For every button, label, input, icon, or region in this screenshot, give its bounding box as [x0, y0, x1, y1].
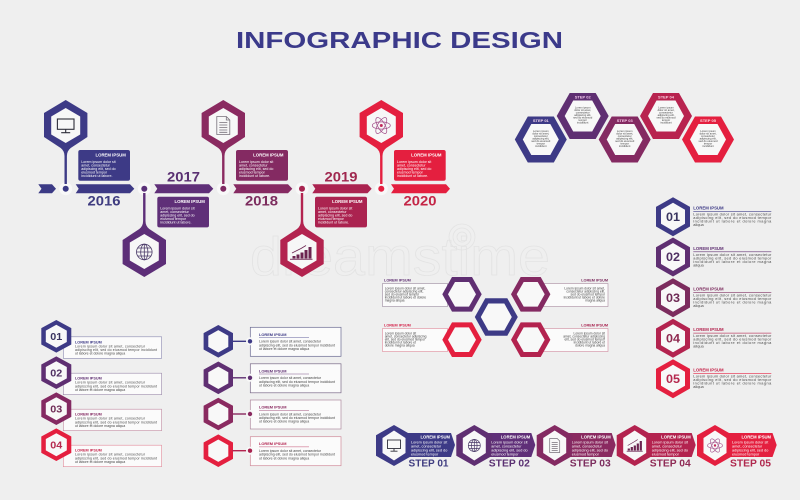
banner step 04: STEP 04	[650, 459, 691, 470]
step 01 hexagon: dolor sit amet,	[532, 132, 549, 136]
item 02: adipiscing elit, sed do eiusmod tempor	[693, 255, 772, 260]
step 05 hexagon: consectetur	[701, 134, 715, 138]
timeline arrows	[38, 184, 450, 193]
step 05 hexagon: dolor sit amet,	[700, 132, 717, 136]
text box 2016: Lorem ipsum dolor sit	[81, 160, 116, 164]
item 01	[656, 197, 772, 236]
item 05: adipiscing elit, sed do eiusmod tempor	[693, 377, 772, 382]
banner step 04: LOREM IPSUM	[661, 434, 691, 440]
year labels	[88, 168, 437, 208]
pin 2019 with chart icon	[280, 193, 324, 277]
connected item 1	[204, 325, 341, 358]
item 04: aliqua	[693, 344, 705, 349]
banner step 05: Lorem ipsum dolor sit	[732, 441, 769, 445]
item 03	[656, 278, 772, 317]
top left callout	[382, 279, 448, 306]
item 01: 01	[666, 212, 681, 224]
step 03 hexagon: STEP 03	[617, 118, 633, 123]
step 02 hexagon: consectetur	[576, 110, 590, 114]
list item 02	[41, 356, 162, 395]
text box 2018: adipiscing elit, sed do	[239, 167, 273, 171]
step 04 hexagon: Lorem ipsum	[658, 106, 675, 110]
bottom step banners	[376, 425, 777, 470]
banner step 01: eiusmod tempor	[411, 452, 439, 456]
step 03 hexagon: dolor sit amet,	[616, 132, 633, 136]
list item 02: 02	[50, 369, 63, 380]
text box 2019: eiusmod tempor	[318, 217, 345, 221]
list item 04: ut labore et dolore magna aliqua	[75, 460, 125, 464]
top right callout: sed do eiusmod tempor	[571, 292, 606, 296]
item 03: adipiscing elit, sed do eiusmod tempor	[693, 296, 772, 301]
banner step 03: Lorem ipsum dolor sit	[572, 441, 609, 445]
banner step 05: adipiscing elit, sed do	[732, 449, 768, 453]
item 02: 02	[666, 252, 680, 264]
item 01: LOREM IPSUM	[693, 205, 724, 210]
step 04 hexagon: adipiscing elit,	[658, 113, 675, 117]
icon: document	[217, 116, 230, 134]
step 05 hexagon	[682, 116, 734, 162]
connected item 1: Lorem ipsum dolor sit amet, consectetur	[259, 340, 322, 344]
text box 2020: Lorem ipsum dolor sit	[397, 160, 431, 164]
icon: globe	[136, 244, 152, 260]
item 05: incididunt ut labore et dolore magna	[693, 381, 772, 386]
icon: document small	[550, 438, 560, 452]
step 02 hexagon: dolor sit amet,	[574, 108, 591, 112]
text box 2017	[157, 197, 209, 227]
item 01: aliqua	[693, 222, 705, 227]
list item 03: LOREM IPSUM	[75, 413, 102, 417]
step 05 hexagon: tempor	[704, 142, 712, 146]
list item 01: Lorem ipsum dolor sit amet, consectetur	[75, 344, 146, 348]
connected item 3: ut labore et dolore magna aliqua	[259, 420, 309, 424]
pin 2018 with document icon	[202, 100, 245, 184]
step 01 hexagon: STEP 01	[533, 118, 550, 123]
list item 01	[41, 320, 162, 358]
text box 2018: LOREM IPSUM	[253, 152, 284, 158]
list item 04: LOREM IPSUM	[75, 449, 102, 453]
text box 2016: LOREM IPSUM	[95, 152, 126, 158]
banner step 02: LOREM IPSUM	[501, 434, 531, 440]
step 02 hexagon: sed do eiusmod	[573, 116, 593, 120]
banner step 03: eiusmod tempor	[572, 452, 600, 456]
step 04 hexagon: incididunt	[660, 120, 672, 124]
pin 2016 with monitor icon	[44, 100, 87, 184]
item 03: LOREM IPSUM	[693, 287, 724, 292]
banner step 01: LOREM IPSUM	[420, 434, 451, 440]
connected item 4	[204, 434, 341, 467]
step 04 hexagon: dolor sit amet,	[658, 108, 675, 112]
banner step 01: Lorem ipsum dolor sit	[411, 441, 448, 445]
title: INFOGRAPHIC DESIGN	[236, 27, 563, 53]
text box 2017: eiusmod tempor	[160, 217, 187, 221]
banner step 04: Lorem ipsum dolor sit	[652, 441, 689, 445]
crimson hexagon	[511, 322, 550, 357]
item 04	[656, 319, 772, 358]
top left callout: magna aliqua	[385, 298, 405, 302]
item 04: Lorem ipsum dolor sit amet, consectetur	[693, 333, 772, 338]
list item 03: 03	[50, 405, 63, 416]
item 01: adipiscing elit, sed do eiusmod tempor	[693, 215, 772, 220]
banner step 03: STEP 03	[570, 459, 611, 470]
list item 03: adipiscing elit, sed do eiusmod tempor incididunt	[75, 420, 157, 424]
top left callout: sed do eiusmod tempor	[385, 292, 420, 296]
connected item 1: ut labore et dolore magna aliqua	[259, 347, 309, 351]
timeline nodes	[59, 182, 388, 195]
item 03: Lorem ipsum dolor sit amet, consectetur	[693, 293, 772, 298]
connected item 3: adipiscing elit, sed do eiusmod tempor incididunt	[259, 416, 335, 420]
banner step 03	[537, 425, 616, 470]
step 01 hexagon: consectetur	[534, 134, 548, 138]
text box 2018: Lorem ipsum dolor sit	[239, 160, 273, 164]
list item 01: adipiscing elit, sed do eiusmod tempor incididunt	[75, 348, 157, 352]
list item 04: 04	[50, 441, 63, 452]
text box 2020	[394, 150, 446, 181]
item 02: Lorem ipsum dolor sit amet, consectetur	[693, 252, 772, 257]
banner step 02: eiusmod tempor	[491, 452, 519, 456]
top left callout: consectetur adipiscing elit,	[385, 290, 423, 294]
step 04 hexagon: STEP 04	[658, 94, 675, 100]
top left callout: LOREM IPSUM	[384, 279, 411, 283]
top right callout: LOREM IPSUM	[581, 279, 608, 283]
text box 2020: amet, consectetur	[397, 164, 426, 168]
banner step 02: adipiscing elit, sed do	[491, 449, 528, 453]
step 05 hexagon: Lorem ipsum	[700, 129, 717, 133]
connected item 4: LOREM IPSUM	[259, 441, 286, 446]
banner step 04: amet, consectetur	[652, 445, 683, 449]
pin 2017 with globe icon	[123, 193, 166, 277]
step 03 hexagon	[599, 116, 651, 162]
step 02 hexagon: incididunt	[577, 120, 589, 124]
item 01: Lorem ipsum dolor sit amet, consectetur	[693, 211, 772, 216]
banner step 05: amet, consectetur	[732, 445, 763, 449]
blue centre hexagon	[475, 298, 518, 336]
banner step 01: amet, consectetur	[411, 445, 442, 449]
text box 2017: Lorem ipsum dolor sit	[160, 207, 195, 211]
list item 01: ut labore et dolore magna aliqua	[75, 352, 125, 356]
item 04: 04	[666, 333, 681, 345]
text box 2018: amet, consectetur	[239, 164, 268, 168]
bottom left callout: LOREM IPSUM	[384, 324, 411, 328]
banner step 05: eiusmod tempor	[732, 452, 760, 456]
top right callout: magna aliqua	[585, 298, 605, 302]
text box 2019: amet, consectetur	[318, 210, 347, 214]
year labels: 2019	[324, 168, 358, 184]
item 03: 03	[666, 293, 680, 305]
bottom right callout: elit, sed do eiusmod tempor	[564, 338, 606, 342]
step 03 hexagon: sed do eiusmod	[615, 139, 635, 143]
step 04 hexagon: consectetur	[659, 110, 673, 114]
text box 2018: incididunt ut labore.	[239, 174, 270, 178]
top right callout: incididunt ut labore et dolore	[564, 296, 605, 300]
centre hexagon cluster	[382, 277, 608, 357]
text box 2018	[236, 150, 288, 181]
connected item 2: LOREM IPSUM	[259, 368, 286, 373]
red hexagon	[442, 322, 482, 357]
text box 2017: LOREM IPSUM	[174, 199, 205, 204]
step 03 hexagon: tempor	[621, 142, 629, 146]
banner step 02: STEP 02	[489, 459, 530, 470]
top left callout: incididunt ut labore et dolore	[385, 296, 426, 300]
list item 04: Lorem ipsum dolor sit amet, consectetur	[75, 453, 146, 457]
step 02 hexagon: tempor	[579, 118, 587, 122]
list item 04: adipiscing elit, sed do eiusmod tempor incididunt	[75, 456, 157, 460]
text box 2019	[315, 197, 367, 227]
connected item 2: ut labore et dolore magna aliqua	[259, 383, 309, 387]
item 03: aliqua	[693, 303, 705, 308]
text box 2020: adipiscing elit, sed do	[397, 167, 431, 171]
text box 2019: Lorem ipsum dolor sit	[318, 207, 352, 211]
banner step 01: adipiscing elit, sed do	[411, 449, 447, 453]
step 01 hexagon: tempor	[537, 142, 545, 146]
step 02 hexagon: STEP 02	[575, 94, 591, 100]
list item 02: Lorem ipsum dolor sit amet, consectetur	[75, 381, 146, 385]
year labels: 2016	[88, 192, 121, 208]
item 04: adipiscing elit, sed do eiusmod tempor	[693, 337, 772, 342]
top right callout	[543, 279, 608, 306]
list item 02: LOREM IPSUM	[75, 377, 102, 381]
year labels: 2018	[245, 192, 278, 208]
text box 2016: eiusmod tempor	[81, 170, 108, 174]
list item 03	[41, 392, 162, 431]
bottom left callout: Lorem ipsum dolor sit	[385, 331, 416, 335]
step 01 hexagon: incididunt	[535, 144, 547, 148]
bottom left callout: incididunt ut labore et	[385, 340, 416, 344]
step 05 hexagon: STEP 05	[700, 118, 717, 123]
bottom right callout	[543, 324, 608, 352]
step 01 hexagon	[515, 116, 567, 162]
banner step 03: amet, consectetur	[572, 445, 603, 449]
icon: monitor	[57, 119, 74, 133]
right numbered list	[656, 197, 772, 398]
text box 2016: adipiscing elit, sed do	[81, 167, 116, 171]
list item 01: 01	[50, 332, 63, 343]
step hexagon chain	[515, 93, 734, 162]
icon: chart small	[627, 440, 643, 452]
bottom right callout: Lorem ipsum dolor sit	[573, 331, 605, 335]
step 05 hexagon: sed do eiusmod	[699, 139, 718, 143]
banner step 04	[617, 425, 696, 470]
item 02	[656, 238, 772, 276]
banner step 05	[697, 425, 777, 470]
text box 2017: adipiscing elit, sed do	[160, 214, 195, 218]
step 04 hexagon	[640, 93, 692, 139]
connected item 1: LOREM IPSUM	[259, 332, 286, 337]
top right callout: consectetur adipiscing elit,	[566, 290, 605, 294]
connected item 4: adipiscing elit, sed do eiusmod tempor incididunt	[259, 453, 335, 457]
step 03 hexagon: consectetur	[618, 134, 632, 138]
icon: chart	[290, 246, 312, 260]
item 04: incididunt ut labore et dolore magna	[693, 340, 772, 345]
connected item 1: adipiscing elit, sed do eiusmod tempor incididunt	[259, 343, 335, 347]
text box 2017: incididunt ut labore.	[160, 221, 191, 225]
connected item 4: Lorem ipsum dolor sit amet, consectetur	[259, 449, 322, 453]
bottom left callout: elit, sed do eiusmod tempor	[385, 338, 426, 342]
step 04 hexagon: tempor	[662, 118, 670, 122]
text box 2019: adipiscing elit, sed do	[318, 214, 352, 218]
list item 03: ut labore et dolore magna aliqua	[75, 424, 125, 428]
step 03 hexagon: incididunt	[619, 144, 631, 148]
icon: globe small	[468, 440, 480, 452]
text box 2019: incididunt ut labore.	[318, 221, 349, 225]
banner step 05: LOREM IPSUM	[741, 434, 772, 440]
top right callout: Lorem ipsum dolor sit amet,	[564, 286, 605, 290]
banner step 02: Lorem ipsum dolor sit	[491, 441, 529, 445]
step 01 hexagon: sed do eiusmod	[531, 139, 551, 143]
step 02 hexagon	[557, 93, 609, 139]
list item 01: LOREM IPSUM	[75, 340, 102, 344]
icon: monitor small	[388, 440, 400, 451]
bottom left callout	[382, 324, 448, 352]
item 02: incididunt ut labore et dolore magna	[693, 259, 772, 264]
step 05 hexagon: incididunt	[702, 144, 714, 148]
timeline	[38, 100, 450, 277]
bottom left callout: dolore magna aliqua	[385, 344, 415, 348]
bottom right callout: amet, consectetur adipiscing	[563, 334, 605, 338]
bottom left numbered list	[41, 320, 162, 467]
item 02: aliqua	[693, 262, 705, 267]
bottom right callout: LOREM IPSUM	[581, 324, 608, 328]
connected item 3: LOREM IPSUM	[259, 404, 286, 410]
connected item 3: Lorem ipsum dolor sit amet, consectetur	[259, 412, 322, 416]
banner step 02	[456, 425, 535, 470]
item 05: Lorem ipsum dolor sit amet, consectetur	[693, 374, 772, 379]
text box 2016: amet, consectetur	[81, 164, 111, 168]
list item 02: adipiscing elit, sed do eiusmod tempor incididunt	[75, 384, 157, 388]
list item 04	[41, 428, 162, 467]
icon: atom small	[708, 438, 722, 453]
bottom left callout: amet, consectetur adipiscing	[385, 334, 427, 338]
step 02 hexagon: Lorem ipsum	[575, 106, 591, 110]
item 04: LOREM IPSUM	[693, 327, 724, 332]
item 02: LOREM IPSUM	[693, 246, 724, 251]
connected item 2: Lorem ipsum dolor sit amet, consectetur	[259, 376, 322, 380]
banner step 03: adipiscing elit, sed do	[572, 449, 608, 453]
item 01: incididunt ut labore et dolore magna	[693, 218, 772, 223]
text box 2018: eiusmod tempor	[239, 170, 266, 174]
year labels: 2017	[167, 168, 200, 184]
list item 02: ut labore et dolore magna aliqua	[75, 388, 125, 392]
plum hexagon	[511, 277, 550, 312]
step 05 hexagon: adipiscing elit,	[700, 136, 717, 140]
banner step 04: eiusmod tempor	[652, 452, 680, 456]
connected item 4: ut labore et dolore magna aliqua	[259, 456, 309, 460]
year labels: 2020	[404, 192, 437, 208]
watermark: dreamstime	[250, 227, 550, 287]
text box 2020: LOREM IPSUM	[411, 152, 442, 158]
step 03 hexagon: Lorem ipsum	[617, 129, 633, 133]
banner step 05: STEP 05	[730, 459, 771, 470]
connected hexagon list	[204, 325, 341, 467]
item 05: aliqua	[693, 384, 705, 389]
text box 2019: LOREM IPSUM	[332, 199, 363, 204]
connected item 2	[204, 362, 341, 394]
banner step 03: LOREM IPSUM	[581, 434, 611, 440]
purple hexagon	[442, 277, 482, 312]
bottom right callout: incididunt ut labore et	[574, 340, 605, 344]
text box 2016: incididunt ut labore.	[81, 174, 112, 178]
step 02 hexagon: adipiscing elit,	[574, 113, 591, 117]
banner step 02: amet, consectetur	[491, 445, 522, 449]
bottom right callout: dolore magna aliqua	[575, 344, 605, 348]
text box 2020: incididunt ut labore.	[397, 174, 428, 178]
connected item 2: adipiscing elit, sed do eiusmod tempor incididunt	[259, 380, 335, 384]
item 03: incididunt ut labore et dolore magna	[693, 300, 772, 305]
text box 2020: eiusmod tempor	[397, 170, 424, 174]
item 05: LOREM IPSUM	[693, 368, 724, 373]
icon: atom	[372, 116, 390, 135]
step 04 hexagon: sed do eiusmod	[657, 116, 676, 120]
banner step 01	[376, 425, 455, 470]
pin 2020 with atom icon	[360, 100, 403, 184]
connected item 3	[204, 398, 341, 430]
step 01 hexagon: Lorem ipsum	[533, 129, 549, 133]
step 01 hexagon: adipiscing elit,	[532, 136, 549, 140]
top left callout: Lorem ipsum dolor sit amet,	[385, 286, 425, 290]
text box 2017: amet, consectetur	[160, 210, 190, 214]
text box 2016	[78, 150, 130, 181]
item 05	[656, 359, 772, 398]
step 03 hexagon: adipiscing elit,	[616, 136, 633, 140]
item 05: 05	[666, 374, 681, 386]
list item 03: Lorem ipsum dolor sit amet, consectetur	[75, 417, 146, 421]
banner step 01: STEP 01	[408, 459, 449, 470]
banner step 04: adipiscing elit, sed do	[652, 449, 688, 453]
